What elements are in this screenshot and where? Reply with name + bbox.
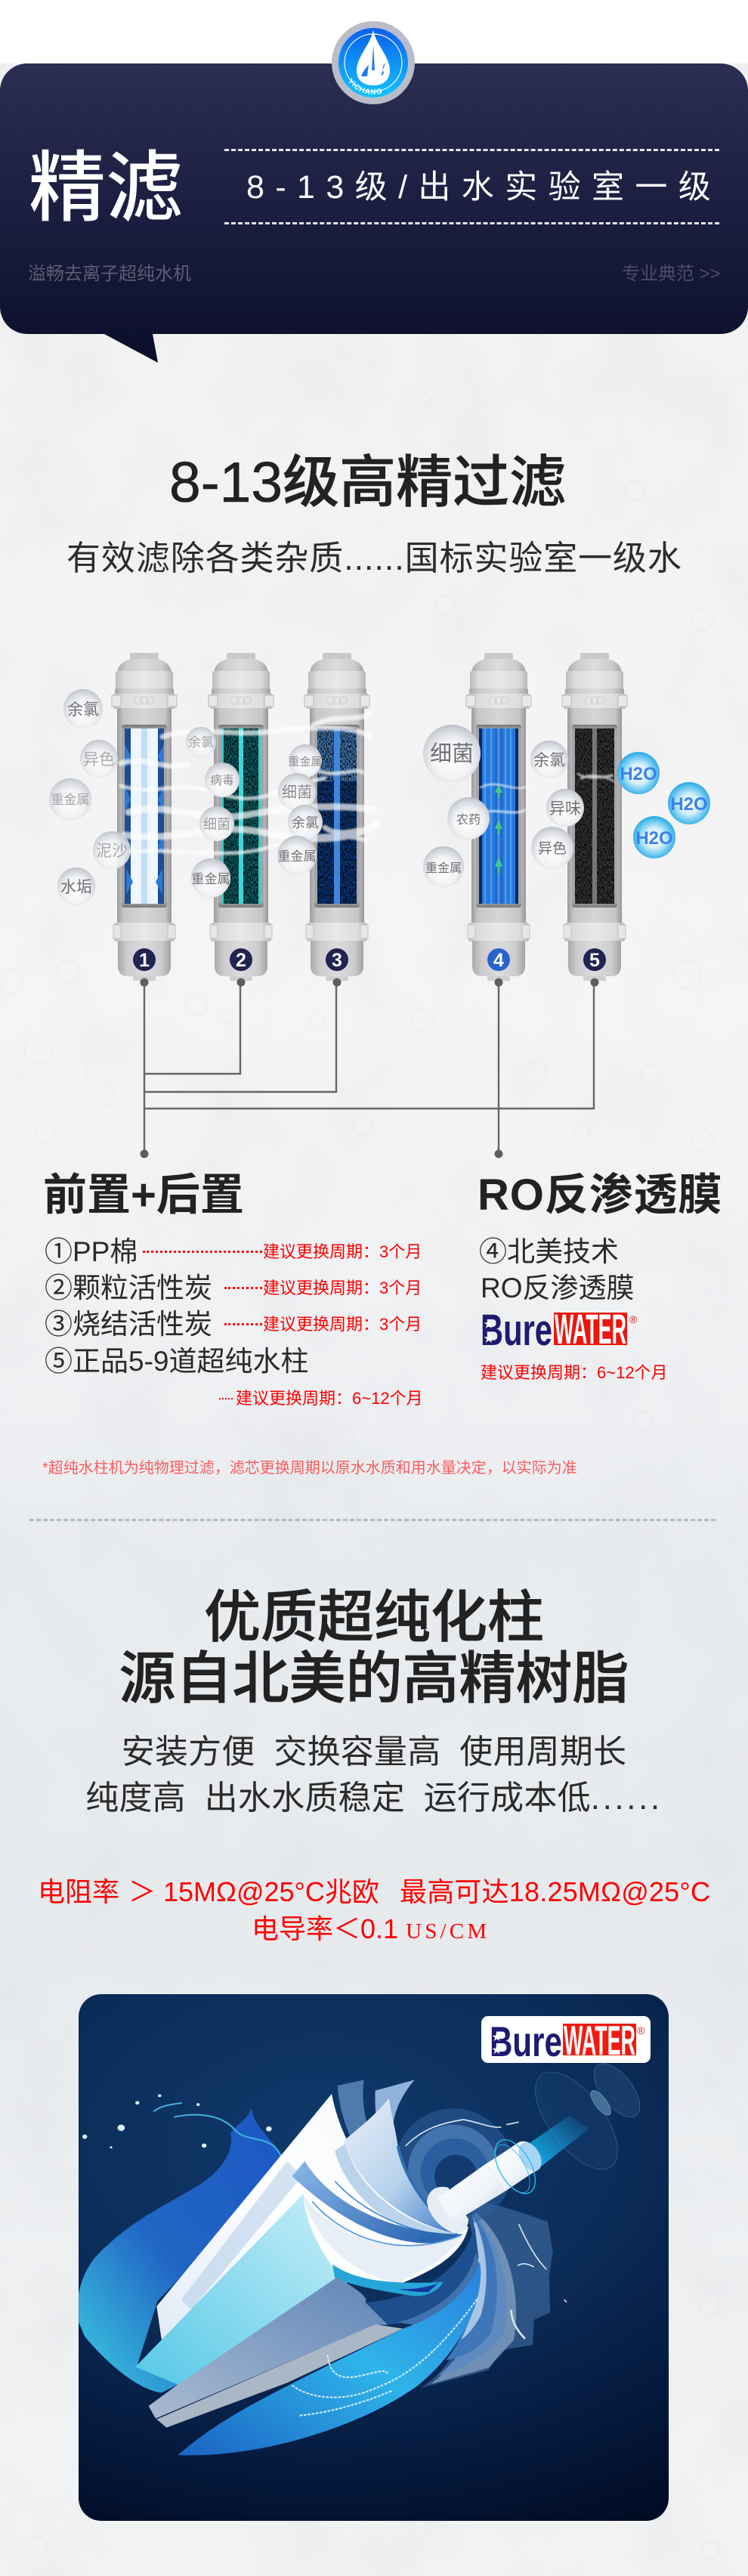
red spec line 1: 电阻率 xyxy=(38,1876,119,1907)
list row 3: 建议更换周期：3个月 xyxy=(263,1315,422,1334)
bubble: 余氯: 余氯 xyxy=(533,752,565,769)
banner caption right: 专业典范 >> xyxy=(622,264,721,284)
swirl discs xyxy=(394,2108,512,2227)
bubble: 重金属 xyxy=(277,836,317,875)
water splash over filters xyxy=(121,714,614,853)
bubble: 重金属 xyxy=(423,846,464,887)
beam xyxy=(529,2116,589,2166)
blue band xyxy=(292,2161,463,2244)
product image panel xyxy=(79,1994,669,2521)
list row 2 xyxy=(45,1273,422,1303)
dots xyxy=(141,1150,503,1158)
banner subtitle: 8-13级/出水实验室一级 xyxy=(246,169,722,206)
bubble: 病毒: 病毒 xyxy=(210,774,234,787)
logo: BureWATER badge: ® xyxy=(637,2024,645,2036)
rod xyxy=(438,2163,505,2219)
bubble: 细菌 xyxy=(199,806,234,841)
swirl of filter sheets xyxy=(135,2080,589,2455)
replacement note right: 建议更换周期：6~12个月 xyxy=(481,1363,668,1382)
rear right sheets xyxy=(421,2201,553,2388)
badge 4: 4 xyxy=(493,950,504,971)
cyan rings xyxy=(487,2133,543,2200)
dashed divider xyxy=(29,1519,716,1521)
bubble: H2O: H2O xyxy=(620,764,657,784)
dashed rule bottom xyxy=(224,222,719,224)
white main sheet xyxy=(156,2094,468,2385)
red spec line 1: 15MΩ@25°C兆欧 xyxy=(163,1876,379,1907)
bubble: 水垢: 水垢 xyxy=(60,879,92,896)
cyan sheet xyxy=(135,2194,348,2385)
filter 4 xyxy=(466,653,531,987)
footnote: *超纯水柱机为纯物理过滤，滤芯更换周期以原水水质和用水量决定，以实际为准 xyxy=(42,1460,577,1477)
blue grey sheet xyxy=(149,2277,388,2419)
list row 4: 建议更换周期：6~12个月 xyxy=(236,1389,423,1408)
bubble: 细菌 xyxy=(278,773,316,811)
bubble: 重金属: 重金属 xyxy=(51,793,89,807)
heading: resin xyxy=(119,1585,629,1710)
dark wedge xyxy=(365,2227,478,2325)
bubble: 异味: 异味 xyxy=(549,800,581,818)
grey sheet xyxy=(156,2324,403,2428)
far lens rings xyxy=(519,2057,649,2181)
bubble: 水垢 xyxy=(57,867,95,905)
bubble: 异色 xyxy=(80,740,118,778)
bubble: H2O: H2O xyxy=(670,794,708,815)
bubble: H2O xyxy=(617,752,660,794)
list: RO反渗透膜: RO反渗透膜 xyxy=(481,1273,635,1303)
list: 北美技术: ④北美技术 xyxy=(479,1236,619,1267)
bubble: 细菌: 细菌 xyxy=(282,784,312,801)
icon: brand emblem: YICHANG xyxy=(349,78,382,94)
bubble: 农药: 农药 xyxy=(456,813,481,827)
bubble: 细菌: 细菌 xyxy=(430,741,474,766)
logo: BureWATER badge: ★ xyxy=(492,2044,502,2055)
list row 1: 建议更换周期：3个月 xyxy=(263,1242,422,1261)
badge 1: 1 xyxy=(139,950,150,971)
badge 3 xyxy=(326,948,348,971)
heading: resin: 优质超纯化柱 xyxy=(204,1585,544,1649)
bubble: 细菌 xyxy=(423,725,481,782)
left water and droplets xyxy=(79,2057,649,2392)
badge 5: 5 xyxy=(589,950,600,971)
logo: BureWATER small: ★ xyxy=(484,1332,494,1344)
bubble: 泥沙: 泥沙 xyxy=(96,843,128,860)
logo: BureWATER badge: ★ xyxy=(492,2031,502,2043)
red spec line 1: ＞ xyxy=(128,1876,156,1907)
badge 1 xyxy=(133,948,156,971)
petal under white xyxy=(335,2144,461,2239)
logo: BureWATER badge xyxy=(481,2016,651,2063)
bubble: 余氯 xyxy=(186,727,216,757)
subheading: 有效滤除各类杂质......国标实验室一级水 xyxy=(66,539,682,577)
list row 4 xyxy=(45,1346,423,1408)
filter 2 xyxy=(209,653,274,987)
splashes xyxy=(406,2120,567,2339)
benefits text: 安装方便 交换容量高 使用周期长 纯度高 出水水质稳定 运行成本低...... xyxy=(85,1733,663,1817)
red spec line 1 xyxy=(38,1876,710,1907)
icon: brand emblem xyxy=(332,21,415,104)
bubble: 余氯 xyxy=(63,689,103,728)
badge 5 xyxy=(583,948,606,971)
connector lines xyxy=(144,982,594,1154)
banner caption left: 溢畅去离子超纯水机 xyxy=(28,264,191,284)
bubble: H2O: H2O xyxy=(635,828,673,849)
badge 2 xyxy=(230,948,252,971)
list row 1 xyxy=(45,1236,422,1267)
filter 5 xyxy=(562,653,627,987)
bubble: 异色: 异色 xyxy=(83,751,115,768)
heading: 8-13级高精过滤: 8-13级高精过滤 xyxy=(169,450,566,514)
logo: BureWATER small xyxy=(481,1310,638,1347)
bubble: 重金属: 重金属 xyxy=(425,861,462,875)
bottom water xyxy=(178,2262,481,2455)
bubble: 余氯 xyxy=(288,805,323,840)
bubble: 余氯: 余氯 xyxy=(292,815,319,830)
bubble: 异色 xyxy=(531,827,573,869)
heading: 前置+后置: 前置+后置 xyxy=(43,1170,244,1220)
bubble: 重金属: 重金属 xyxy=(278,849,316,864)
bubble: 异味 xyxy=(546,789,584,827)
bubbles xyxy=(49,689,710,905)
hub xyxy=(427,2187,468,2233)
filter 1 xyxy=(112,653,177,987)
badge 3: 3 xyxy=(332,950,342,971)
bubble: 重金属: 重金属 xyxy=(192,872,230,886)
bubble: 泥沙 xyxy=(93,831,131,869)
rear top petals xyxy=(338,2080,448,2231)
red spec line 2: 电导率＜0.1 US/CM xyxy=(252,1913,490,1944)
list row 3: ③烧结活性炭 xyxy=(45,1309,212,1340)
bubble: 余氯: 余氯 xyxy=(67,701,99,719)
bubble: 重金属 xyxy=(49,778,91,821)
bubble: 余氯 xyxy=(530,741,568,778)
logo: BureWATER small: ★ xyxy=(484,1318,494,1330)
heading: RO反渗透膜: RO反渗透膜 xyxy=(478,1170,722,1220)
list row 4: ⑤正品5-9道超纯水柱 xyxy=(45,1346,308,1377)
water strip xyxy=(332,2265,444,2296)
bubble: H2O xyxy=(633,816,675,858)
bubble: 异色: 异色 xyxy=(538,840,567,857)
heading: resin: 源自北美的高精树脂 xyxy=(119,1647,629,1710)
title: 精滤: 精滤 xyxy=(29,145,183,231)
list row 1: ①PP棉 xyxy=(45,1236,138,1267)
header banner panel xyxy=(0,63,748,363)
dashed rule top xyxy=(224,149,719,151)
logo: BureWATER small: ® xyxy=(629,1313,638,1325)
bubble: 重金属 xyxy=(288,744,323,778)
white band xyxy=(302,2194,463,2284)
bubble: 重金属: 重金属 xyxy=(288,756,323,768)
bubble: 病毒 xyxy=(205,762,240,797)
bubble: 细菌: 细菌 xyxy=(203,817,230,832)
badge 4 xyxy=(487,948,510,971)
bubble: 余氯: 余氯 xyxy=(188,735,214,750)
bubble: 重金属 xyxy=(191,858,230,898)
bubble: 农药 xyxy=(447,797,490,840)
red spec line 1: 最高可达18.25MΩ@25°C xyxy=(400,1876,710,1907)
bubble: H2O xyxy=(668,782,710,824)
badge 2: 2 xyxy=(236,950,246,971)
filter 3 xyxy=(304,653,369,987)
list row 2: ②颗粒活性炭 xyxy=(45,1273,212,1303)
filter diagram xyxy=(49,653,710,1158)
list row 2: 建议更换周期：3个月 xyxy=(263,1279,422,1297)
white blue petal xyxy=(344,2098,459,2234)
list row 3 xyxy=(45,1309,422,1340)
